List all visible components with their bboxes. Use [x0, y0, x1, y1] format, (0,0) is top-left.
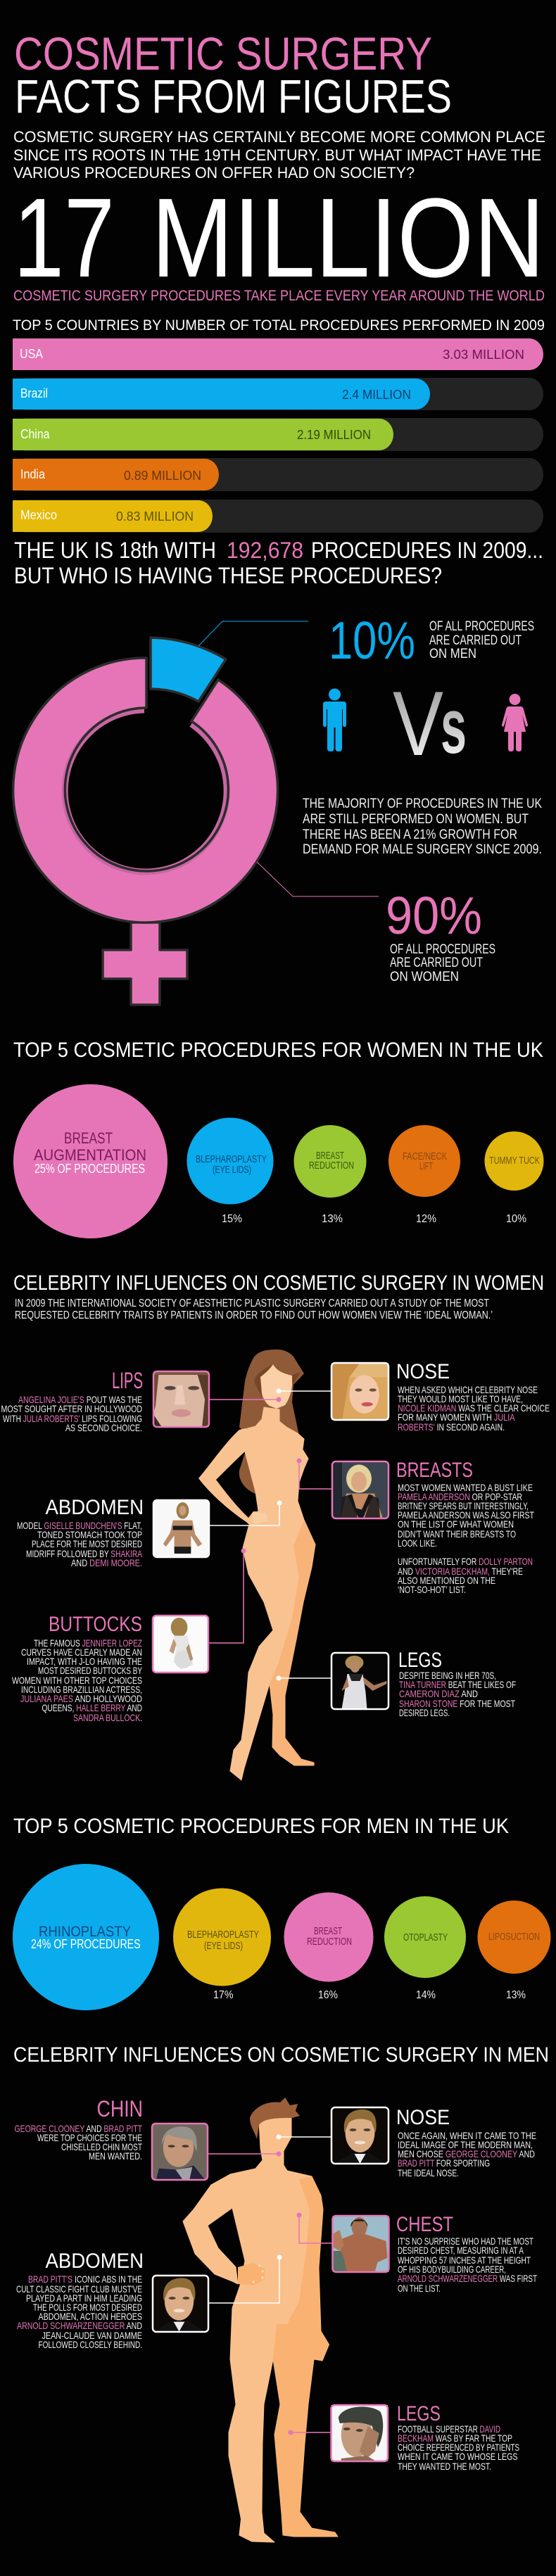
panel: men's legs: FOOTBALL SUPERSTAR DAVID: [398, 2423, 500, 2435]
panel: abdomen: AND DEMI MOORE.: [71, 1557, 142, 1568]
bubble: blepharoplasty: BLEPHAROPLASTY: [196, 1153, 267, 1165]
panel: chest: CHEST: [396, 2213, 453, 2236]
panel: men's nose: [331, 2106, 536, 2178]
bubble: liposuction: [477, 1901, 550, 2001]
panel: breasts: BREASTS: [396, 1459, 473, 1482]
bubble: blepharoplasty: (EYE LIDS): [204, 1940, 243, 1952]
panel: men's nose: MEN CHOSE GEORGE CLOONEY AND: [398, 2148, 535, 2159]
callout: 90% women: ARE CARRIED OUT: [390, 956, 483, 970]
panel: men's abdomen: FOLLOWED CLOSELY BEHIND.: [38, 2339, 142, 2350]
photo: Brad Pitt abs: [153, 2276, 208, 2332]
callout: 10% men: 10%: [329, 611, 415, 670]
panel: chin: WERE TOP CHOICES FOR THE: [37, 2132, 142, 2143]
title: COSMETIC SURGERY: [14, 27, 432, 80]
bubble: breast reduction: REDUCTION: [307, 1936, 352, 1948]
panel: buttocks: THE FAMOUS JENNIFER LOPEZ: [34, 1637, 142, 1649]
bubble: tummy tuck: [484, 1131, 543, 1225]
heading: celebrity influences women: [13, 1271, 544, 1321]
panel: lips: LIPS: [112, 1368, 143, 1393]
panel: chest: ARNOLD SCHWARZENEGGER WAS FIRST: [398, 2273, 537, 2284]
bar: India: 0.89 MILLION: [124, 468, 201, 483]
bar: Brazil: 2.4 MILLION: [342, 387, 411, 402]
bubble: breast reduction: BREAST: [314, 1925, 342, 1937]
bar: USA: USA: [20, 346, 44, 361]
icon: woman: [502, 694, 528, 751]
panel: chin: MEN WANTED.: [89, 2150, 142, 2162]
donut inner edge: [65, 708, 228, 871]
cross of female symbol: [103, 922, 187, 1005]
photo: Pamela Anderson: [332, 1461, 388, 1518]
bubble: tummy tuck: 10%: [506, 1213, 526, 1225]
callout: 90% women: ON WOMEN: [390, 970, 459, 984]
panel: legs: TINA TURNER BEAT THE LIKES OF: [399, 1679, 516, 1690]
panel: abdomen: MODEL GISELLE BUNDCHEN'S FLAT,: [17, 1520, 142, 1531]
panel: nose: [331, 1360, 550, 1433]
panel: lips: [1, 1368, 209, 1433]
bubble chart: women procedures: [13, 1084, 543, 1238]
bar: China: China: [20, 426, 50, 441]
photo: Arnold Schwarzenegger: [332, 2216, 388, 2272]
panel: men's nose: NOSE: [396, 2106, 450, 2129]
photo: David Beckham: [331, 2405, 388, 2461]
bubble chart: men procedures: [13, 1864, 550, 2010]
connectors: man: [208, 2135, 332, 2435]
panel: breasts: [332, 1459, 534, 1595]
bubble: breast augmentation: AUGMENTATION: [34, 1146, 146, 1164]
panel: buttocks: SANDRA BULLOCK.: [73, 1712, 142, 1723]
versus: s: [441, 683, 467, 770]
bar: India: India: [20, 467, 46, 481]
bar: Mexico: 0.83 MILLION: [116, 509, 194, 524]
bubble: breast reduction: 13%: [322, 1213, 343, 1225]
intro text: SINCE ITS ROOTS IN THE 19TH CENTURY. BUT WHAT IMPACT HAVE THE: [13, 146, 541, 164]
panel: lips: ANGELINA JOLIE'S POUT WAS THE: [18, 1394, 142, 1405]
panel: chest: OF HIS BODYBUILDING CAREER,: [398, 2264, 506, 2275]
bar: China: [13, 418, 543, 451]
bar: China: 2.19 MILLION: [297, 427, 371, 442]
panel: chin: [14, 2096, 208, 2180]
callout: 10% men: ARE CARRIED OUT: [429, 633, 522, 648]
panel: men's legs: LEGS: [397, 2402, 441, 2425]
panel: men's abdomen: CULT CLASSIC FIGHT CLUB MUST'VE: [16, 2283, 142, 2295]
panel: breasts: LOOK LIKE.: [398, 1537, 437, 1549]
bubble: rhinoplasty: [13, 1864, 159, 2010]
bar: Mexico: [13, 500, 543, 533]
big number: 17 million: 17: [13, 175, 115, 300]
uk statement: BUT WHO IS HAVING THESE PROCEDURES?: [14, 563, 442, 588]
panel: nose: ROBERTS' IN SECOND AGAIN.: [398, 1421, 505, 1433]
panel: chin: GEORGE CLOONEY AND BRAD PITT: [14, 2123, 142, 2134]
versus: V: [393, 672, 443, 775]
title: FACTS FROM FIGURES: [15, 70, 452, 123]
panel: breasts: ON THE LIST OF WHAT WOMEN: [398, 1518, 514, 1530]
figure: man: [183, 2098, 338, 2542]
panel: breasts: UNFORTUNATELY FOR DOLLY PARTON: [398, 1556, 533, 1567]
bubble: breast reduction: [294, 1125, 366, 1225]
panel: nose: NOSE: [396, 1360, 450, 1383]
intro text: [13, 128, 545, 182]
text: majority of procedures: [303, 797, 542, 857]
panel: lips: WITH JULIA ROBERTS' LIPS FOLLOWING: [3, 1413, 142, 1424]
panel: chest: [332, 2213, 537, 2294]
panel: buttocks: CURVES HAVE CLEARLY MADE AN: [21, 1647, 142, 1658]
panel: breasts: DIDN'T WANT THEIR BREASTS TO: [398, 1528, 516, 1540]
bubble: breast augmentation: BREAST: [64, 1129, 113, 1147]
photo: Brad Pitt: [331, 2107, 388, 2164]
panel: legs: CAMERON DIAZ AND: [399, 1688, 478, 1699]
panel: men's legs: WHEN IT CAME TO WHOSE LEGS: [398, 2451, 518, 2462]
panel: buttocks: JULIANA PAES AND HOLLYWOOD: [20, 1693, 142, 1704]
panel: legs: DESIRED LEGS.: [399, 1707, 450, 1718]
bar: USA: [13, 338, 543, 370]
callout: 90% women: OF ALL PROCEDURES: [390, 942, 495, 957]
panel: men's abdomen: ABDOMEN: [45, 2250, 144, 2273]
panel: chest: ON THE LIST.: [398, 2283, 441, 2294]
bubble: blepharoplasty: [173, 1889, 271, 2001]
bubble: otoplasty: [384, 1896, 466, 2001]
photo: Gisele Bundchen: [153, 1500, 209, 1557]
panel: men's legs: BECKHAM WAS BY FAR THE TOP: [398, 2432, 512, 2444]
leader line: men: [198, 621, 308, 646]
intro text: VARIOUS PROCEDURES ON OFFER HAD ON SOCIETY?: [13, 164, 415, 182]
panel: abdomen: MIDRIFF FOLLOWED BY SHAKIRA: [26, 1548, 142, 1559]
panel: breasts: PAMELA ANDERSON OR POP-STAR: [398, 1491, 522, 1502]
panel: legs: [331, 1649, 516, 1718]
uk statement: 192,678: [227, 538, 303, 563]
panel: buttocks: INCLUDING BRAZILLIAN ACTRESS,: [21, 1684, 142, 1695]
bubble: blepharoplasty: [187, 1117, 273, 1225]
connectors: woman: [208, 1389, 332, 1680]
photo: Nicole Kidman: [331, 1363, 388, 1420]
chart: female symbol donut 90/10: [13, 637, 278, 1005]
uk statement: THE UK IS 18th WITH: [14, 538, 216, 563]
heading: top 5 for men: TOP 5 COSMETIC PROCEDURES FOR MEN IN THE UK: [13, 1815, 509, 1838]
panel: breasts: ALSO MENTIONED ON THE: [398, 1575, 495, 1586]
panel: legs: SHARON STONE FOR THE MOST: [399, 1698, 515, 1709]
bar: India: [13, 458, 543, 491]
title: [14, 27, 452, 123]
bubble: rhinoplasty: RHINOPLASTY: [39, 1924, 131, 1940]
panel: men's nose: BRAD PITT FOR SPORTING: [398, 2157, 490, 2169]
bubble: otoplasty: 14%: [416, 1989, 436, 2001]
uk statement: [14, 538, 543, 588]
callout: 10% men: ON MEN: [429, 647, 476, 661]
callout: 90% women: 90%: [386, 886, 482, 945]
bubble: rhinoplasty: 24% OF PROCEDURES: [31, 1937, 141, 1951]
bubble: blepharoplasty: 15%: [222, 1213, 242, 1225]
bubble: face/neck lift: 12%: [416, 1213, 436, 1225]
bubble: breast reduction: [284, 1893, 373, 2001]
panel: men's abdomen: JEAN-CLAUDE VAN DAMME: [42, 2330, 142, 2341]
bubble: breast reduction: 16%: [318, 1989, 338, 2001]
bubble: otoplasty: OTOPLASTY: [403, 1931, 448, 1943]
panel: abdomen: PLACE FOR THE MOST DESIRED: [32, 1538, 142, 1549]
panel: men's nose: THE IDEAL NOSE.: [398, 2167, 459, 2178]
panel: buttocks: MOST DESIRED BUTTOCKS BY: [38, 1665, 142, 1676]
bar: Mexico: Mexico: [20, 507, 57, 522]
panel: nose: FOR MANY WOMEN WITH JULIA: [398, 1411, 515, 1423]
panel: men's legs: THEY WANTED THE MOST.: [398, 2461, 491, 2472]
panel: buttocks: QUEENS, HALLE BERRY AND: [42, 1702, 142, 1713]
panel: men's abdomen: [16, 2250, 208, 2350]
bubble: liposuction: 13%: [506, 1989, 526, 2001]
bar chart: top 5 countries: [13, 317, 545, 533]
bubble: breast augmentation: 25% OF PROCEDURES: [34, 1162, 145, 1176]
bar: Brazil: Brazil: [20, 386, 48, 400]
bar: USA: 3.03 MILLION: [443, 347, 524, 362]
bubble: blepharoplasty: (EYE LIDS): [213, 1164, 251, 1176]
callout: 90% women: [386, 886, 495, 984]
panel: breasts: ‘NOT-SO-HOT’ LIST.: [398, 1584, 466, 1595]
icon: man: [323, 688, 346, 751]
donut segment: women 90%: [13, 658, 278, 922]
bubble: breast reduction: REDUCTION: [309, 1160, 354, 1172]
panel: legs: LEGS: [398, 1649, 442, 1672]
panel: men's abdomen: ABDOMEN, ACTION HEROES: [38, 2311, 142, 2322]
figure: woman: [198, 1350, 315, 1780]
donut inner shadow: [65, 710, 227, 872]
panel: legs: DESPITE BEING IN HER 70S,: [399, 1670, 496, 1681]
bubble: blepharoplasty: 17%: [213, 1989, 234, 2001]
panel: buttocks: IMPACT, WITH J-LO HAVING THE: [27, 1656, 142, 1667]
donut segment: men 10%: [151, 637, 226, 702]
intro text: COSMETIC SURGERY HAS CERTAINLY BECOME MORE COMMON PLACE: [13, 128, 545, 146]
panel: abdomen: TONED STOMACH TOOK TOP: [37, 1529, 142, 1540]
panel: chin: CHISELLED CHIN MOST: [61, 2141, 142, 2152]
panel: abdomen: [17, 1496, 209, 1568]
photo: George Clooney: [152, 2124, 208, 2180]
panel: men's abdomen: THE POLLS FOR MOST DESIRED: [33, 2302, 142, 2313]
callout: 10% men: [329, 611, 534, 670]
panel: men's abdomen: BRAD PITT'S ICONIC ABS IN THE: [28, 2273, 142, 2285]
bubble: breast reduction: BREAST: [316, 1150, 344, 1162]
bubble: blepharoplasty: BLEPHAROPLASTY: [187, 1929, 259, 1941]
panel: men's legs: [331, 2402, 519, 2472]
panel: lips: AS SECOND CHOICE.: [65, 1422, 142, 1433]
panel: abdomen: ABDOMEN: [45, 1496, 144, 1519]
panel: buttocks: WOMEN WITH OTHER TOP CHOICES: [12, 1675, 142, 1686]
bubble: face/neck lift: LIFT: [419, 1160, 433, 1172]
leader line: women: [257, 862, 379, 896]
bubble: breast augmentation: [13, 1084, 168, 1238]
panel: men's abdomen: ARNOLD SCHWARZENEGGER AND: [17, 2320, 142, 2331]
bubble: face/neck lift: FACE/NECK: [403, 1150, 447, 1162]
bar: Brazil: [13, 378, 543, 410]
panel: lips: MOST SOUGHT AFTER IN HOLLYWOOD: [1, 1403, 142, 1414]
photo: Tina Turner: [331, 1653, 388, 1709]
panel: men's abdomen: PLAYED A PART IN HIM LEADING: [26, 2292, 142, 2304]
panel: buttocks: [12, 1613, 208, 1723]
text: majority of procedures: THERE HAS BEEN A 21% GROWTH FOR: [303, 827, 517, 842]
panel: chin: CHIN: [97, 2096, 143, 2121]
bubble: face/neck lift: [388, 1125, 460, 1225]
photo: Angelina Jolie: [153, 1371, 209, 1427]
photo: Jennifer Lopez: [153, 1616, 208, 1673]
panel: breasts: AND VICTORIA BECKHAM, THEY'RE: [398, 1566, 523, 1577]
panel: buttocks: BUTTOCKS: [49, 1613, 142, 1636]
